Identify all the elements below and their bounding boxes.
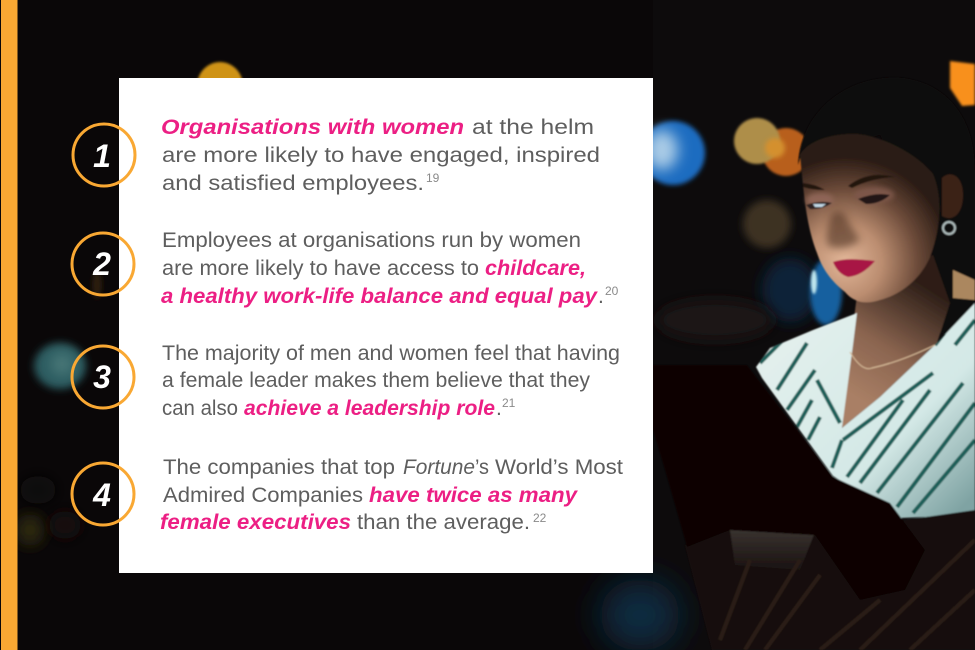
statement 2: are more likely to have access to <box>162 257 479 280</box>
bokeh: blue <box>641 121 705 185</box>
statement 3: The majority of men and women feel that having <box>162 342 620 365</box>
lips <box>833 259 875 277</box>
shirt <box>755 302 975 520</box>
statement 2: . <box>598 285 604 308</box>
statement 1: at the helm <box>472 116 594 139</box>
bokeh: teal left <box>34 343 86 389</box>
statement 3: can also <box>162 397 238 420</box>
bokeh: dim olive left <box>15 514 45 546</box>
bokeh: orange top right <box>950 61 975 106</box>
statement 1: are more likely to have engaged, inspired <box>162 144 600 167</box>
face <box>800 134 939 302</box>
statement 4 <box>160 456 623 534</box>
statement 4: than the average. <box>357 511 530 534</box>
statement 3: 21 <box>502 396 516 410</box>
statement 1: Organisations with women <box>161 115 464 139</box>
statement 2: a healthy work-life balance and equal pay <box>161 284 598 308</box>
number badge 3 <box>72 346 134 408</box>
statement 4: Fortune <box>403 456 475 479</box>
number badge 4: 4 <box>92 477 111 513</box>
statement 4: female executives <box>160 510 351 534</box>
number badge 2: 2 <box>92 246 111 282</box>
orange side bar <box>1 0 18 650</box>
bokeh: pale yellow <box>734 118 780 164</box>
statement 1: and satisfied employees. <box>162 172 424 195</box>
eyes <box>806 194 890 209</box>
statement 4: The companies that top <box>163 456 395 479</box>
eye shadows <box>806 193 834 207</box>
statement 2: childcare, <box>485 256 586 280</box>
statement 3: achieve a leadership role <box>244 396 495 420</box>
statement 4: ’s <box>475 456 489 479</box>
hair <box>798 77 975 340</box>
background sliver behind neck <box>953 270 975 300</box>
statement 4: 22 <box>533 511 547 525</box>
statement 3: a female leader makes them believe that they <box>162 369 591 392</box>
statement 4: Admired Companies <box>163 484 363 507</box>
necklace <box>850 345 935 369</box>
eyebrows <box>803 175 895 190</box>
bokeh: dim olive <box>743 200 791 248</box>
statement 4: World’s Most <box>495 456 623 479</box>
number badge 3: 3 <box>93 359 111 395</box>
lower shirt in shadow <box>680 510 975 650</box>
statement 1 <box>161 115 600 195</box>
statement 2: 20 <box>605 284 619 298</box>
statement 4: have twice as many <box>369 483 578 507</box>
bokeh: yellow above panel <box>197 62 243 110</box>
nose shadow <box>827 212 860 248</box>
tablet and arm <box>653 365 925 600</box>
number badge 1 <box>73 124 135 186</box>
statement 2 <box>161 229 619 308</box>
number badge 4 <box>72 463 134 525</box>
bokeh: orange <box>762 128 810 176</box>
ear and earring <box>942 174 963 234</box>
statement 3: . <box>496 397 502 420</box>
statement 2: Employees at organisations run by women <box>162 229 581 252</box>
photo: woman looking at tablet <box>653 77 975 650</box>
statement 1: 19 <box>426 171 440 185</box>
number badge 2 <box>72 233 134 295</box>
statement 3 <box>162 342 620 420</box>
bokeh: blue beside chin <box>810 259 842 325</box>
neck <box>842 255 950 428</box>
white text panel <box>119 78 653 573</box>
number badge 1: 1 <box>93 138 111 174</box>
